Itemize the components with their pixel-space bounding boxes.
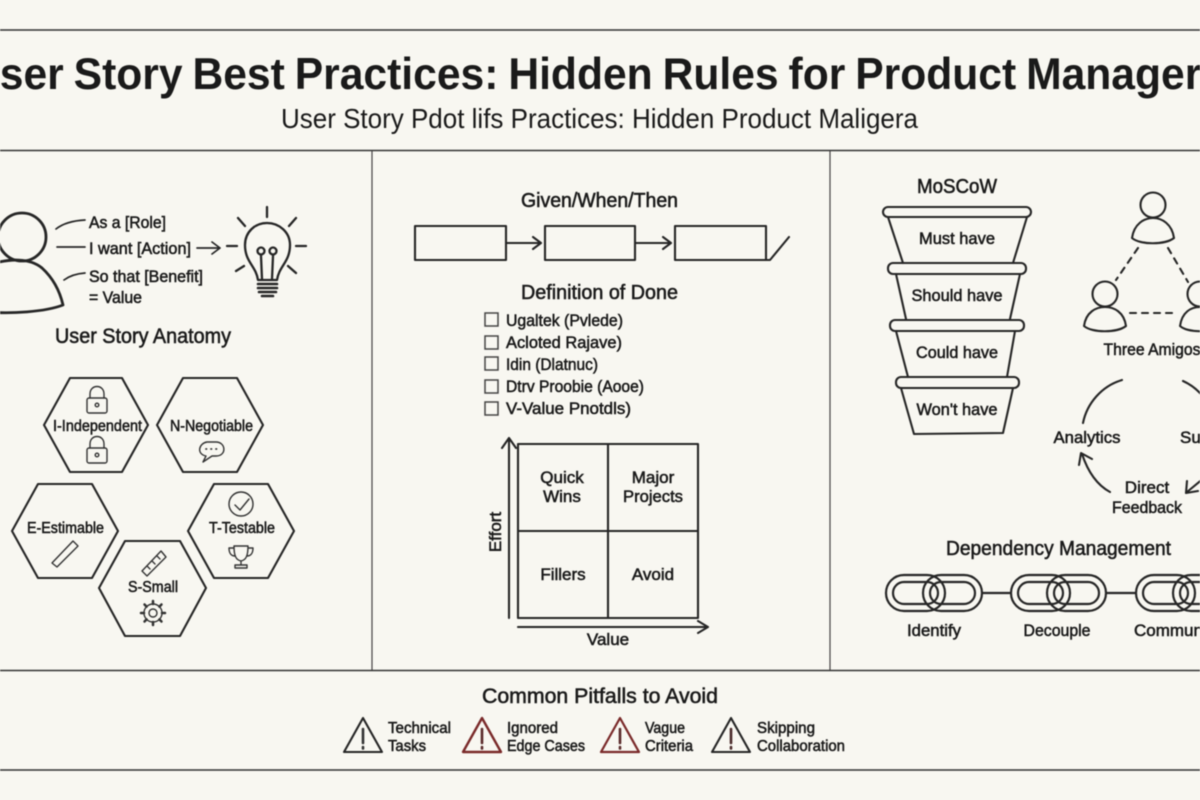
heading: definition of done: Definition of Done: [521, 282, 678, 304]
story template text: I want [Action]: [89, 239, 191, 258]
chart: value effort matrix: Effort: [486, 512, 505, 552]
diagram: feedback loop: Feedback: [1112, 498, 1182, 517]
story template text: As a [Role]: [89, 213, 166, 232]
checklist: Idin (Dlatnuc): [506, 355, 598, 374]
pitfall: technical tasks: [344, 718, 451, 755]
checklist: Acloted Rajave): [506, 333, 622, 352]
connector lines: [56, 220, 220, 280]
pitfall: skipping collaboration: Skipping: [757, 720, 815, 737]
diagram: three amigos: [1084, 192, 1200, 359]
chart: value effort matrix: Major: [632, 468, 675, 487]
checklist: Dtrv Proobie (Aooe): [506, 377, 644, 396]
panel: collaboration and priority: [883, 176, 1200, 640]
hexagon: estimable: E-Estimable: [27, 520, 104, 537]
chart: value effort matrix: Projects: [623, 487, 683, 506]
hexagon: independent: [44, 378, 148, 472]
panel: user story anatomy: [0, 207, 306, 636]
hexagon: independent: I-Independent: [53, 418, 142, 435]
pitfall: skipping collaboration: [712, 718, 845, 755]
pitfall: vague criteria: [601, 718, 693, 755]
chart: value effort matrix: Avoid: [632, 565, 674, 584]
pitfall: technical tasks: Technical: [388, 720, 451, 737]
diagram: feedback loop: Direct: [1125, 478, 1169, 497]
stacked buckets: moscow: Won't have: [916, 400, 998, 419]
icon: user: [0, 213, 63, 313]
pitfall: ignored edge cases: Edge Cases: [507, 738, 585, 755]
story template text: = Value: [89, 288, 142, 307]
hexagon: estimable: [12, 484, 118, 578]
pitfall: ignored edge cases: [463, 718, 585, 755]
hexagon: testable: T-Testable: [209, 520, 275, 537]
icon: lock: [87, 386, 107, 413]
heading: given when then: Given/When/Then: [521, 190, 678, 212]
subtitle: User Story Pdot lifs Practices: Hidden Product Maligera: [281, 103, 918, 134]
hexagon: testable: [188, 484, 294, 578]
pitfall: ignored edge cases: Ignored: [507, 720, 558, 737]
panel: acceptance and prioritisation: [415, 190, 789, 649]
chain diagram: [886, 575, 1200, 640]
icon: gear: [141, 601, 165, 625]
chart: value effort matrix: Quick: [540, 468, 584, 487]
checklist: [485, 311, 644, 418]
hexagon: small: S-Small: [128, 579, 178, 596]
icon: speech bubble: [200, 442, 224, 462]
pitfall: technical tasks: Tasks: [388, 738, 426, 755]
pitfall: vague criteria: Criteria: [645, 738, 693, 755]
hexagon: small: [99, 541, 206, 636]
chart: value effort matrix: Value: [587, 630, 629, 649]
heading: moscow: MoSCoW: [917, 176, 997, 198]
pitfall: skipping collaboration: Collaboration: [757, 738, 845, 755]
checklist: V-Value Pnotdls): [506, 399, 631, 418]
stacked buckets: moscow: Could have: [916, 343, 998, 362]
stacked buckets: moscow: Must have: [919, 229, 995, 248]
hexagon: negotiable: [157, 378, 263, 472]
heading: common pitfalls: Common Pitfalls to Avoid: [482, 685, 718, 708]
story template text: So that [Benefit]: [89, 267, 203, 286]
icon: trophy: [229, 546, 253, 568]
chart: value effort matrix: Fillers: [540, 565, 586, 584]
icon: ruler: [142, 551, 166, 576]
chain diagram: Decouple: [1024, 621, 1090, 640]
icon: ruler: [52, 541, 78, 567]
panel: common pitfalls: [344, 685, 845, 755]
heading: dependency management: Dependency Management: [946, 538, 1171, 560]
pitfall: vague criteria: Vague: [645, 720, 685, 737]
diagram: feedback loop: [1054, 380, 1200, 517]
diagram: feedback loop: Analytics: [1054, 428, 1120, 447]
heading: user story anatomy: User Story Anatomy: [55, 325, 231, 348]
chart: value effort matrix: Wins: [543, 487, 581, 506]
icon: light bulb: [227, 207, 306, 296]
chart: value effort matrix: [486, 438, 708, 649]
icon: lock: [87, 436, 107, 463]
icon: check circle: [229, 492, 253, 516]
chain diagram: Identify: [907, 621, 961, 640]
checklist: Ugaltek (Pvlede): [506, 311, 623, 330]
flow diagram: [415, 226, 789, 260]
stacked buckets: moscow: [883, 207, 1031, 434]
stacked buckets: moscow: Should have: [912, 286, 1002, 305]
story template text: [89, 213, 203, 307]
hexagon: negotiable: N-Negotiable: [170, 418, 253, 435]
